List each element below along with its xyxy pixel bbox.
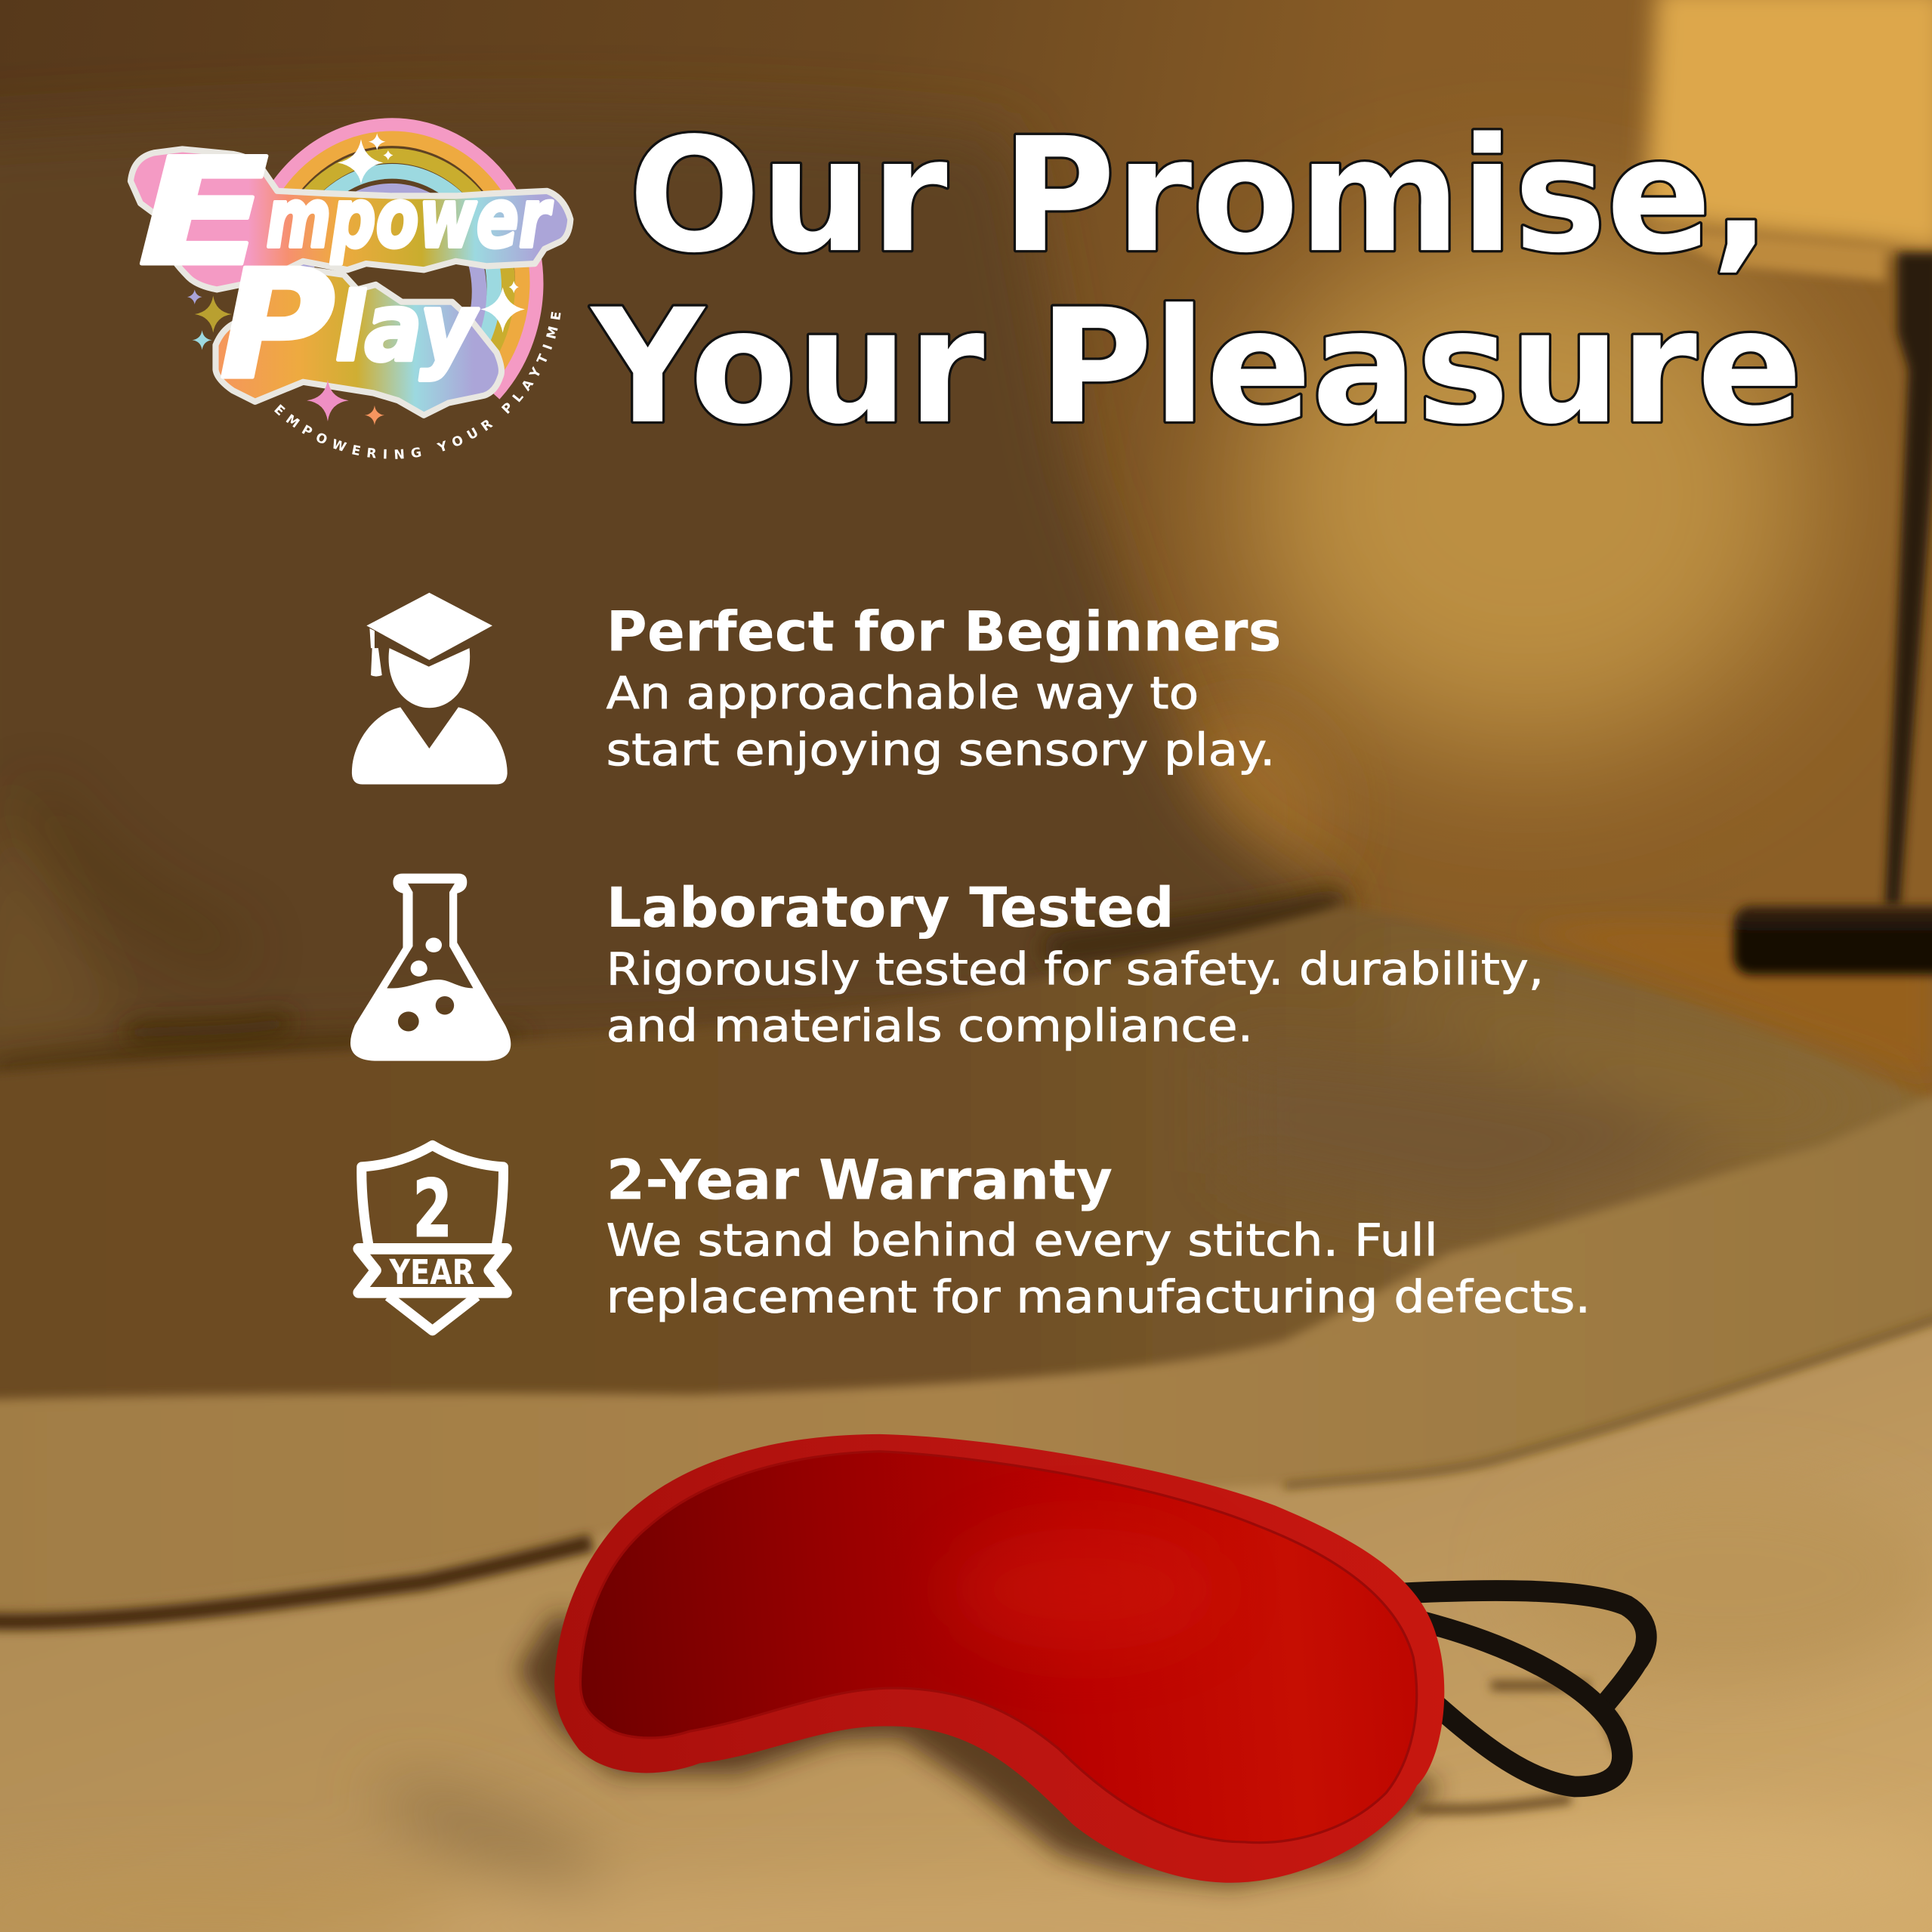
right sheet shadow line xyxy=(1284,1316,1932,1486)
elastic shadow xyxy=(1417,1686,1620,1810)
heading: Laboratory Tested xyxy=(606,876,1174,940)
heading: 2-Year Warranty xyxy=(606,1148,1113,1212)
wordmark Play: P xyxy=(219,237,335,412)
blanket xyxy=(0,906,1932,1516)
pillow xyxy=(0,113,1356,1072)
wordmark Empower: E xyxy=(138,127,269,299)
wall and headboard xyxy=(0,0,1932,1109)
feature: 2-Year Warranty xyxy=(359,1145,1591,1331)
description: replacement for manufacturing defects. xyxy=(606,1270,1591,1322)
sheet shadow line xyxy=(0,1542,591,1622)
title xyxy=(589,104,1803,459)
icon: warranty shield: 2 xyxy=(413,1162,452,1255)
description xyxy=(606,667,1275,776)
mask cast shadow xyxy=(517,1614,1442,1885)
description: We stand behind every stitch. Full xyxy=(606,1214,1438,1266)
wordmark Empower xyxy=(138,127,553,299)
sparkles xyxy=(187,133,525,425)
description xyxy=(606,943,1544,1052)
lamp shade xyxy=(1645,0,1932,252)
description xyxy=(606,1214,1591,1322)
description: start enjoying sensory play. xyxy=(606,724,1275,776)
icon: warranty shield xyxy=(359,1145,506,1331)
rainbow arc xyxy=(248,125,536,394)
curved tagline: EMPOWERING YOUR PLAYTIME xyxy=(274,311,560,459)
icon: flask xyxy=(350,874,511,1061)
title: Our Promise, xyxy=(628,104,1770,288)
mask padded panel xyxy=(580,1452,1417,1843)
heading: Perfect for Beginners xyxy=(606,600,1282,664)
mask rim xyxy=(554,1434,1444,1883)
feature: Laboratory Tested xyxy=(350,874,1544,1061)
elastic strap xyxy=(1405,1591,1647,1786)
pillow creases xyxy=(0,801,1331,1069)
wordmark Play: lay xyxy=(335,273,479,382)
title: Your Pleasure xyxy=(589,276,1803,459)
wordmark Empower: mpower xyxy=(266,171,553,266)
lamp shade lower rim xyxy=(1645,228,1885,281)
sheet fold xyxy=(0,1091,1932,1750)
icon: warranty shield: YEAR xyxy=(389,1252,474,1292)
wordmark Play xyxy=(219,237,479,412)
blanket shading xyxy=(1232,974,1897,1220)
feature: Perfect for Beginners xyxy=(352,593,1282,785)
lamp foot xyxy=(1733,906,1932,974)
Play backing shape xyxy=(215,270,502,415)
flask bubbles xyxy=(411,937,442,977)
logo: Empower Play xyxy=(127,118,574,459)
bedside table xyxy=(1526,922,1932,1078)
Empower backing shape xyxy=(131,149,570,289)
icon: graduate xyxy=(352,593,508,785)
description: and materials compliance. xyxy=(606,1000,1253,1052)
lamp stem xyxy=(1885,252,1932,906)
foreground sheet xyxy=(0,1316,1932,1932)
product: red satin eye mask xyxy=(517,1434,1647,1885)
sheet highlights and lowlights xyxy=(0,1479,1932,1932)
lamp glow on wall xyxy=(1158,234,1811,912)
description: An approachable way to xyxy=(606,667,1199,719)
satin highlight xyxy=(949,1528,1220,1651)
description: Rigorously tested for safety. durability, xyxy=(606,943,1544,995)
